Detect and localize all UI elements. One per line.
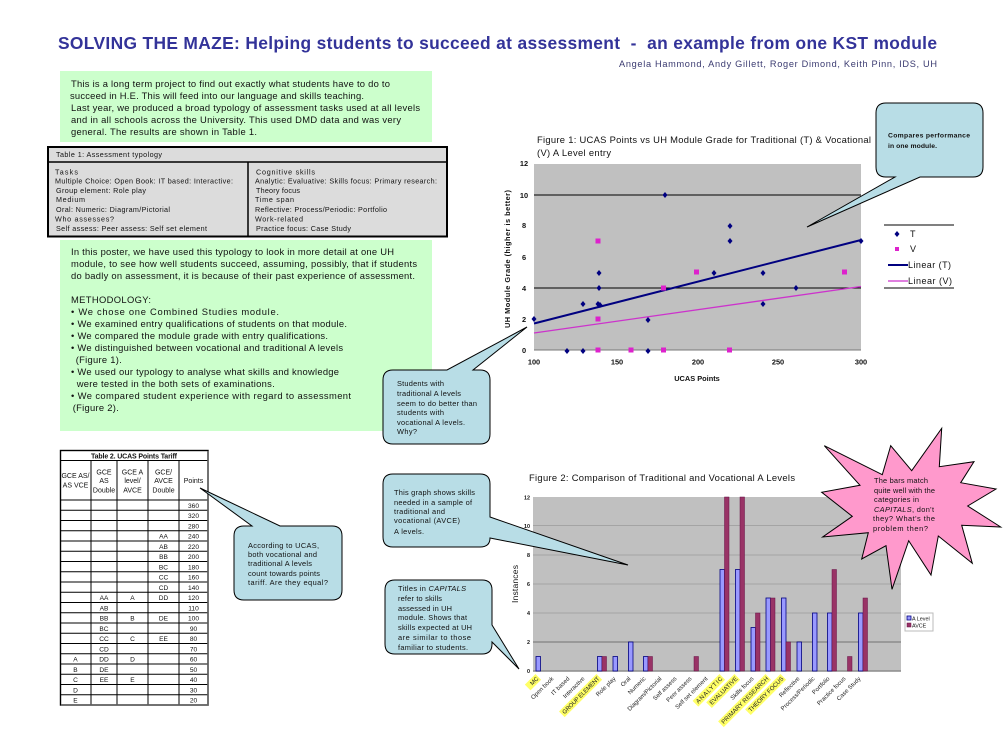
y axis labels: 0: [527, 669, 530, 675]
category labels: Peer assess: [666, 676, 693, 704]
category labels: PRIMARY RESEARCH: [721, 676, 770, 726]
callout: pink starburst: problem then?: [873, 524, 928, 533]
table 2: UCAS points tariff: B: [130, 616, 135, 623]
y axis labels: [524, 496, 530, 675]
legend: figure 2: [905, 613, 933, 631]
panel: methodology: (Figure 2).: [73, 402, 119, 413]
table 1: assessment typology: [48, 147, 447, 237]
table 2: UCAS points tariff: D: [130, 657, 135, 664]
table 2: UCAS points tariff: GCE A: [122, 470, 144, 476]
callout: titles in capitals: skills expected at UH: [398, 623, 472, 632]
panel: methodology: were tested in the both sets of examinations.: [76, 378, 275, 389]
y axis title: Instances: [510, 565, 520, 603]
bar chart: skills comparison: [510, 496, 901, 727]
callout: students with traditional A levels: vocational A levels.: [397, 418, 465, 427]
category labels: MC: [530, 676, 541, 687]
callout: UCAS tariff: According to UCAS,: [248, 541, 319, 550]
category labels: Portfolio: [812, 676, 832, 696]
table 2: UCAS points tariff: Points: [184, 478, 204, 485]
table 2: UCAS points tariff: A: [73, 657, 78, 664]
callout: pink starburst: CAPITALS, don't: [874, 505, 934, 514]
table 1: assessment typology: Analytic: Evaluative: Skills focus: Primary research:: [255, 176, 437, 186]
table 2: UCAS points tariff: A: [130, 595, 135, 602]
panel: methodology: [60, 240, 432, 431]
callout: titles in capitals: familiar to students.: [398, 643, 468, 652]
table 2: UCAS points tariff: BB: [100, 616, 109, 623]
legend: figure 2: AVCE: [912, 624, 927, 630]
callout: UCAS tariff: tariff. Are they equal?: [248, 578, 328, 587]
table 2: UCAS points tariff: DE: [159, 616, 169, 623]
table 2: UCAS points tariff: Table 2. UCAS Points Tariff: [91, 453, 178, 460]
figure 1 heading: (V) A Level entry: [537, 147, 611, 158]
y axis labels: 4: [527, 611, 530, 617]
y axis labels: 12: [520, 159, 528, 168]
table 2: UCAS points tariff: E: [73, 698, 78, 705]
table 2: UCAS points tariff: EE: [100, 677, 109, 684]
table 1: assessment typology: Time span: [255, 195, 294, 204]
table 2: UCAS points tariff: 180: [188, 564, 199, 572]
callout: students with traditional A levels: Why?: [397, 427, 417, 436]
table 2: UCAS points tariff: 40: [190, 677, 197, 684]
table 2: UCAS points tariff: DD: [159, 595, 168, 602]
panel: introduction: and in all schools across the University. This used DMD data and was very: [71, 114, 401, 125]
callout: graph shows skills: This graph shows skills: [394, 488, 475, 497]
x axis labels: 150: [611, 358, 623, 366]
callout: UCAS tariff: traditional A levels: [248, 559, 312, 568]
panel: methodology: (Figure 1).: [76, 354, 122, 365]
legend: figure 1: Linear (V): [908, 276, 952, 286]
table 2: UCAS points tariff: BB: [159, 554, 168, 561]
table 2: UCAS points tariff: CD: [99, 646, 109, 654]
series: AVCE: [602, 497, 868, 671]
panel: introduction: Last year, we produced a broad typology of assessment tasks used at all levels: [71, 102, 420, 113]
category labels: Self set element: [675, 676, 710, 711]
table 1: assessment typology: Self assess: Peer assess: Self set element: [56, 224, 207, 233]
x axis labels: 100: [528, 358, 540, 366]
table 2: UCAS points tariff: CC: [99, 636, 109, 643]
y axis labels: 6: [527, 582, 530, 588]
legend: figure 1: V: [910, 244, 916, 254]
callout: graph shows skills: A levels.: [394, 527, 424, 536]
legend: figure 1: T: [910, 229, 916, 239]
panel: methodology: • We used our typology to analyse what skills and knowledge: [71, 366, 339, 377]
table 2: UCAS points tariff: AS VCE: [63, 482, 89, 490]
y axis labels: 8: [522, 221, 526, 230]
table 2: UCAS points tariff: 90: [190, 626, 197, 633]
table 2: UCAS points tariff: B: [73, 667, 78, 674]
category labels: Role play: [595, 676, 617, 698]
panel: introduction: general. The results are shown in Table 1.: [71, 126, 257, 137]
panel: methodology: • We chose one Combined Studies module.: [71, 306, 279, 317]
y axis labels: 0: [522, 346, 526, 355]
callout: compares performance: [807, 103, 983, 227]
table 2: UCAS points tariff: AA: [100, 595, 109, 602]
scatter chart: UCAS points vs module grade: [503, 159, 867, 383]
table 2: UCAS points tariff: 360: [188, 503, 199, 510]
callout: UCAS tariff: both vocational and: [248, 550, 317, 559]
y axis labels: [520, 159, 528, 355]
panel: methodology: In this poster, we have used this typology to look in more detail at one UH: [71, 246, 394, 257]
x axis labels: 300: [855, 358, 867, 366]
category labels: Case Study: [836, 676, 862, 702]
panel: methodology: do badly on assessment, it is because of their past experience of assessment.: [71, 270, 415, 281]
table 2: UCAS points tariff: DE: [99, 667, 109, 674]
table 1: assessment typology: Medium: [56, 195, 85, 204]
callout: UCAS tariff: count towards points: [248, 569, 320, 578]
callout: titles in capitals: Titles in CAPITALS: [398, 584, 466, 593]
table 1: assessment typology: Work-related: [255, 214, 303, 224]
table 2: UCAS points tariff: BC: [99, 626, 109, 633]
category labels: Practice focus: [817, 676, 847, 707]
table 1: assessment typology: Multiple Choice: Open Book: IT based: Interactive:: [55, 176, 233, 186]
table 2: UCAS points tariff: 20: [190, 698, 197, 705]
table 2: UCAS points tariff: D: [73, 688, 78, 694]
table 2: UCAS points tariff: CC: [159, 575, 168, 582]
category labels: Oral: [620, 676, 632, 688]
category labels: ANALYTIC: [695, 676, 725, 705]
callout: pink starburst: they? What's the: [873, 514, 935, 523]
callout: students with traditional A levels: traditional A levels: [397, 389, 461, 398]
table 2: UCAS points tariff: level/: [124, 478, 141, 485]
table 2: UCAS points tariff: AVCE: [123, 488, 142, 494]
table 1: assessment typology: Reflective: Process/Periodic: Portfolio: [255, 205, 387, 214]
y axis labels: 6: [522, 253, 526, 262]
table 2: UCAS points tariff: AB: [100, 606, 109, 612]
legend: figure 1: [884, 225, 954, 288]
table 2: UCAS points tariff: 100: [188, 616, 199, 623]
callout: UCAS tariff: [200, 488, 342, 600]
table 2: UCAS points tariff: 160: [188, 575, 199, 582]
table 2: UCAS points tariff: 120: [188, 595, 199, 602]
category labels: EVALUATIVE: [709, 676, 739, 707]
y axis labels: 8: [527, 553, 530, 559]
category labels: IT based: [551, 676, 571, 697]
table 1: assessment typology: Oral: Numeric: Diagram/Pictorial: [56, 205, 170, 214]
series: A Level: [536, 570, 863, 671]
table 2: UCAS points tariff: Double: [93, 488, 115, 494]
x axis labels: 200: [692, 358, 704, 366]
y axis labels: 10: [524, 524, 530, 530]
callout: pink starburst: quite well with the: [874, 486, 935, 495]
callout: pink starburst: The bars match: [874, 476, 928, 485]
legend: figure 2: A Level: [912, 616, 930, 622]
table 2: UCAS points tariff: 30: [190, 688, 197, 694]
callout: students with traditional A levels: [383, 327, 527, 444]
category labels: Interactive: [563, 676, 587, 700]
category labels: Self assess: [652, 676, 678, 702]
table 2: UCAS points tariff: AA: [159, 534, 168, 541]
data series: traditional: [532, 192, 864, 354]
x axis title: UCAS Points: [674, 374, 720, 383]
table 2: UCAS points tariff: AVCE: [154, 478, 173, 485]
panel: methodology: module, to see how well students succeed, assuming, possibly, that if students: [71, 258, 417, 269]
callout: titles in capitals: are similar to those: [398, 633, 471, 642]
table 1: assessment typology: Tasks: [55, 168, 78, 176]
callout: students with traditional A levels: seem to do better than: [397, 399, 477, 408]
legend: figure 1: Linear (T): [908, 260, 951, 270]
table 1: assessment typology: Who assesses?: [55, 214, 114, 224]
table 1: assessment typology: Cognitive skills: [256, 168, 315, 176]
table 1: assessment typology: Group element: Role play: [56, 186, 146, 195]
callout: students with traditional A levels: Students with: [397, 379, 444, 388]
table 2: UCAS points tariff: 280: [188, 524, 199, 530]
panel: methodology: • We examined entry qualifications of students on that module.: [71, 318, 347, 329]
category labels: Diagram/Pictorial: [627, 676, 663, 713]
panel: methodology: • We compared student experience with regard to assessment: [71, 390, 351, 401]
figure 1 heading: [537, 134, 871, 158]
title: SOLVING THE MAZE: Helping students to succeed at assessment - an example from one KST module: [58, 33, 937, 53]
panel: methodology: • We distinguished between vocational and traditional A levels: [71, 342, 343, 353]
callout: titles in capitals: [385, 580, 519, 669]
callout: compares performance: in one module.: [888, 143, 937, 150]
table 2: UCAS points tariff: C: [130, 636, 135, 643]
y axis labels: 4: [522, 284, 527, 293]
callout: students with traditional A levels: students with: [397, 408, 444, 417]
y axis labels: 12: [524, 496, 530, 502]
table 2: UCAS points tariff: 240: [188, 534, 199, 541]
category labels: THEORY FOCUS: [748, 676, 785, 714]
table 2: UCAS points tariff: 110: [188, 606, 199, 612]
category labels: GROUP ELEMENT: [562, 676, 602, 716]
panel: introduction: succeed in H.E. This will feed into our language and skills teaching.: [70, 90, 364, 101]
table 2: UCAS points tariff: 140: [188, 585, 199, 592]
table 2: UCAS points tariff: DD: [99, 657, 109, 664]
figure 1 heading: Figure 1: UCAS Points vs UH Module Grade for Traditional (T) & Vocational: [537, 134, 871, 145]
category labels: Skills focus: [730, 676, 755, 702]
table 2: UCAS points tariff: GCE/: [155, 470, 172, 476]
y axis labels: 10: [520, 191, 528, 200]
table 2: UCAS points tariff: GCE: [96, 470, 112, 476]
callout: titles in capitals: refer to skills: [398, 594, 442, 603]
table 2: UCAS points tariff: E: [130, 677, 135, 684]
y axis labels: 2: [522, 315, 526, 324]
panel: methodology: • We compared the module grade with entry qualifications.: [71, 330, 328, 341]
panel: methodology: METHODOLOGY:: [71, 294, 151, 305]
table 2: UCAS points tariff: C: [73, 677, 78, 684]
table 2: UCAS points tariff: EE: [159, 636, 168, 643]
table 2: UCAS points tariff: 200: [188, 554, 199, 561]
callout: pink starburst: [822, 428, 1001, 589]
category labels: Numeric: [627, 676, 647, 696]
table 2: UCAS points tariff: Double: [152, 488, 175, 494]
table 2: UCAS points tariff: CD: [159, 585, 168, 592]
callout: titles in capitals: assessed in UH: [398, 604, 452, 613]
y axis title: UH Module Grade (higher is better): [503, 189, 512, 328]
figure 2 heading: Figure 2: Comparison of Traditional and Vocational A Levels: [529, 472, 795, 483]
callout: graph shows skills: needed in a sample of: [394, 498, 473, 507]
category labels: Reflective: [779, 676, 802, 699]
category labels: Process/Periodic: [780, 676, 816, 712]
panel: introduction: This is a long term project to find out exactly what students have to do to: [71, 78, 390, 89]
callout: titles in capitals: module. Shows that: [398, 613, 467, 622]
table 1: assessment typology: Table 1: Assessment typology: [56, 150, 162, 159]
x axis labels: [528, 358, 867, 366]
table 2: UCAS points tariff: 60: [190, 657, 197, 664]
authors: Angela Hammond, Andy Gillett, Roger Dimond, Keith Pinn, IDS, UH: [619, 59, 937, 69]
panel: introduction: [60, 71, 432, 142]
table 2: UCAS points tariff: 50: [190, 667, 197, 674]
table 2: UCAS points tariff: 70: [190, 646, 197, 654]
table 2: UCAS points tariff: AB: [159, 544, 168, 551]
y axis labels: 2: [527, 640, 530, 646]
callout: graph shows skills: traditional and: [394, 507, 445, 516]
table 2: UCAS points tariff: 220: [188, 544, 199, 551]
table 2: UCAS points tariff: 80: [190, 636, 197, 643]
table 1: assessment typology: Theory focus: [256, 186, 300, 195]
table 2: UCAS points tariff: GCE AS/: [61, 473, 90, 480]
callout: compares performance: Compares performance: [888, 132, 970, 140]
x axis labels: 250: [772, 358, 784, 366]
callout: graph shows skills: [383, 474, 628, 565]
table 2: UCAS points tariff: [60, 450, 208, 705]
callout: graph shows skills: vocational (AVCE): [394, 516, 460, 525]
table 2: UCAS points tariff: AS: [99, 478, 109, 485]
callout: pink starburst: categories in: [874, 495, 919, 504]
table 1: assessment typology: Practice focus: Case Study: [256, 224, 351, 233]
data series: vocational: [596, 238, 847, 352]
table 2: UCAS points tariff: BC: [159, 564, 168, 572]
table 2: UCAS points tariff: 320: [188, 513, 199, 520]
category labels: Open book: [530, 675, 556, 701]
category labels: [525, 674, 862, 727]
